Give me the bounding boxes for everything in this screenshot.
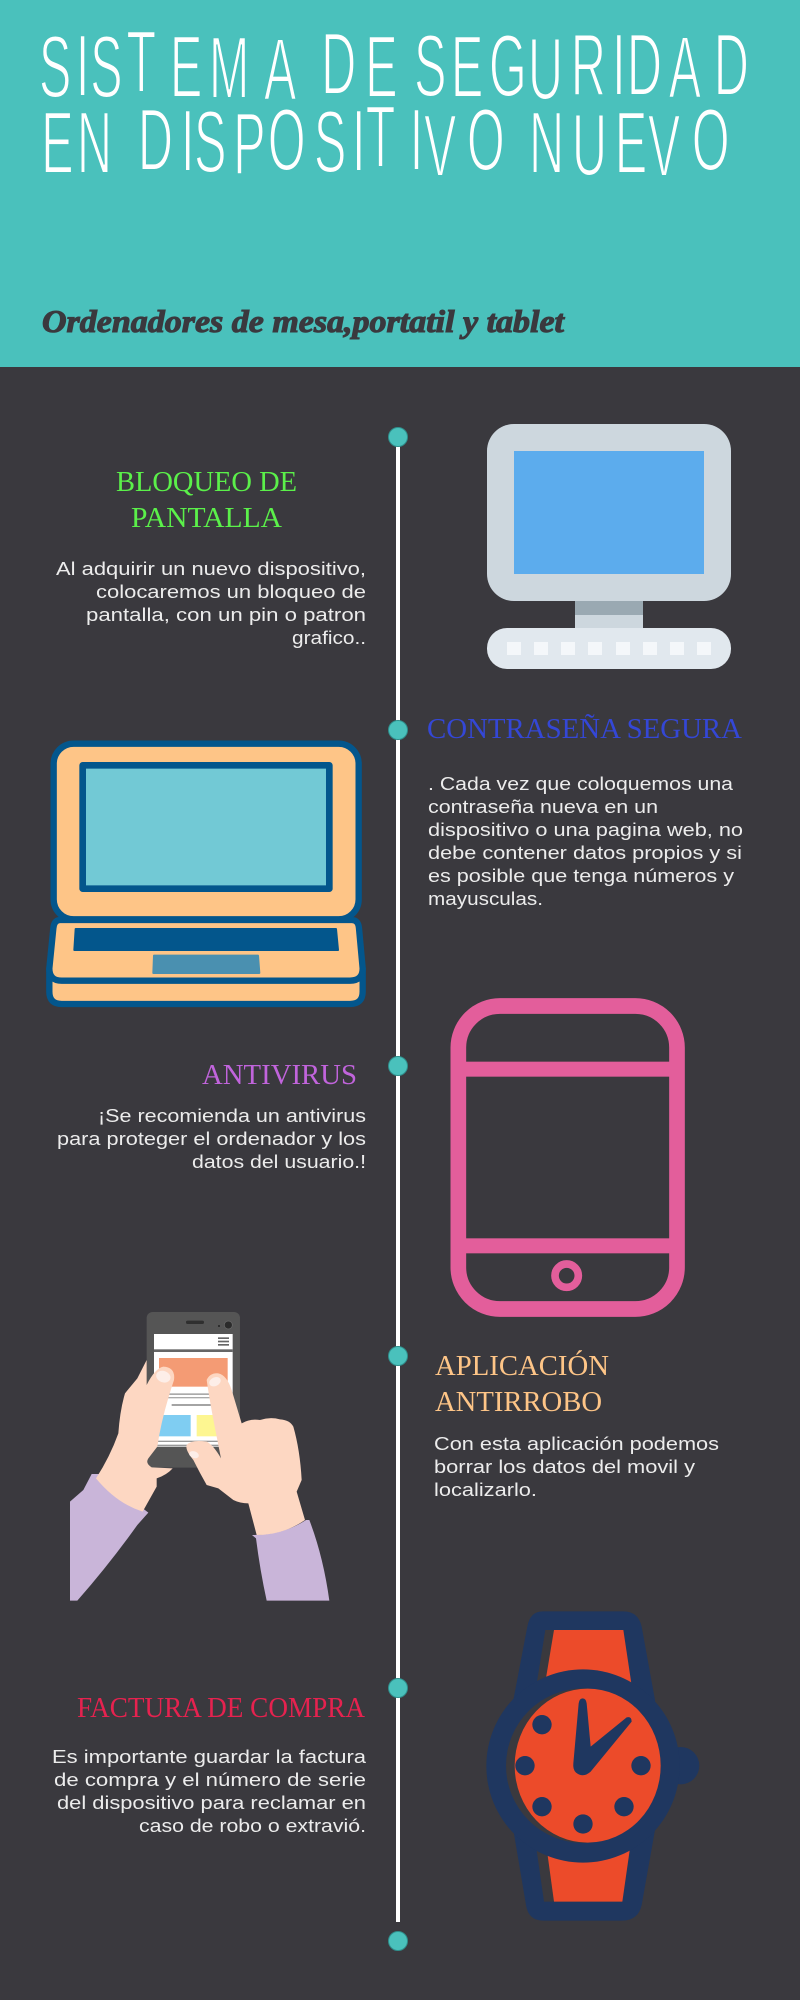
- title: EN DISPOSITIVO NUEVO: [41, 89, 730, 196]
- text: bloqueo de pantalla: [56, 559, 366, 648]
- text: contraseña segura: debe contener datos propios y si: [428, 843, 742, 863]
- text: antivirus: para proteger el ordenador y los: [57, 1129, 366, 1149]
- text: factura de compra: Es importante guardar la factura: [52, 1747, 367, 1767]
- text: contraseña segura: contraseña nueva en un: [428, 797, 658, 817]
- text: bloqueo de pantalla: Al adquirir un nuevo dispositivo,: [56, 559, 366, 579]
- text: aplicación antirrobo: [434, 1434, 719, 1500]
- heading: aplicación antirrobo: [435, 1349, 609, 1418]
- text: factura de compra: del dispositivo para reclamar en: [57, 1793, 366, 1813]
- title: [39, 14, 749, 196]
- icon: desktop computer: [487, 424, 731, 669]
- text: bloqueo de pantalla: grafico..: [292, 628, 366, 648]
- icon: tablet outline: [458, 1006, 677, 1309]
- text: contraseña segura: dispositivo o una pagina web, no: [428, 820, 743, 840]
- timeline: [388, 428, 408, 1950]
- text: contraseña segura: [428, 774, 743, 909]
- text: bloqueo de pantalla: colocaremos un bloqueo de: [96, 582, 366, 602]
- panel: factura de compra: [52, 1692, 367, 1836]
- heading: bloqueo de pantalla: BLOQUEO DE: [116, 466, 297, 498]
- heading: factura de compra: FACTURA DE COMPRA: [77, 1692, 365, 1724]
- panel: antivirus: [57, 1059, 366, 1172]
- panel: contraseña segura: [427, 713, 743, 909]
- text: contraseña segura: es posible que tenga números y: [428, 866, 734, 886]
- heading: bloqueo de pantalla: [116, 466, 297, 534]
- heading: bloqueo de pantalla: PANTALLA: [131, 502, 282, 534]
- heading: aplicación antirrobo: ANTIRROBO: [435, 1386, 602, 1418]
- heading: contraseña segura: CONTRASEÑA SEGURA: [427, 713, 742, 745]
- text: factura de compra: caso de robo o extravió.: [139, 1816, 366, 1836]
- heading: antivirus: ANTIVIRUS: [202, 1059, 357, 1091]
- icon: hands holding smartphone: [70, 1312, 329, 1601]
- text: factura de compra: de compra y el número de serie: [54, 1770, 366, 1790]
- panel: aplicación antirrobo: [434, 1349, 719, 1500]
- text: antivirus: datos del usuario.!: [192, 1152, 366, 1172]
- text: aplicación antirrobo: borrar los datos del movil y: [434, 1457, 695, 1477]
- text: contraseña segura: . Cada vez que coloquemos una: [428, 774, 734, 794]
- heading: aplicación antirrobo: APLICACIÓN: [435, 1349, 609, 1382]
- text: aplicación antirrobo: localizarlo.: [434, 1480, 537, 1500]
- text: contraseña segura: mayusculas.: [428, 889, 543, 909]
- icon: wristwatch: [486, 1611, 699, 1921]
- text: aplicación antirrobo: Con esta aplicación podemos: [434, 1434, 719, 1454]
- text: factura de compra: [52, 1747, 367, 1836]
- panel: header: [0, 0, 800, 367]
- text: bloqueo de pantalla: pantalla, con un pin o patron: [86, 605, 366, 625]
- text: antivirus: ¡Se recomienda un antivirus: [98, 1106, 366, 1126]
- title: SISTEMA DE SEGURIDAD: [39, 14, 749, 120]
- icon: laptop: [49, 744, 363, 1004]
- text: antivirus: [57, 1106, 366, 1172]
- subtitle: Ordenadores de mesa,portatil y tablet: [42, 303, 565, 339]
- panel: bloqueo de pantalla: [56, 466, 366, 648]
